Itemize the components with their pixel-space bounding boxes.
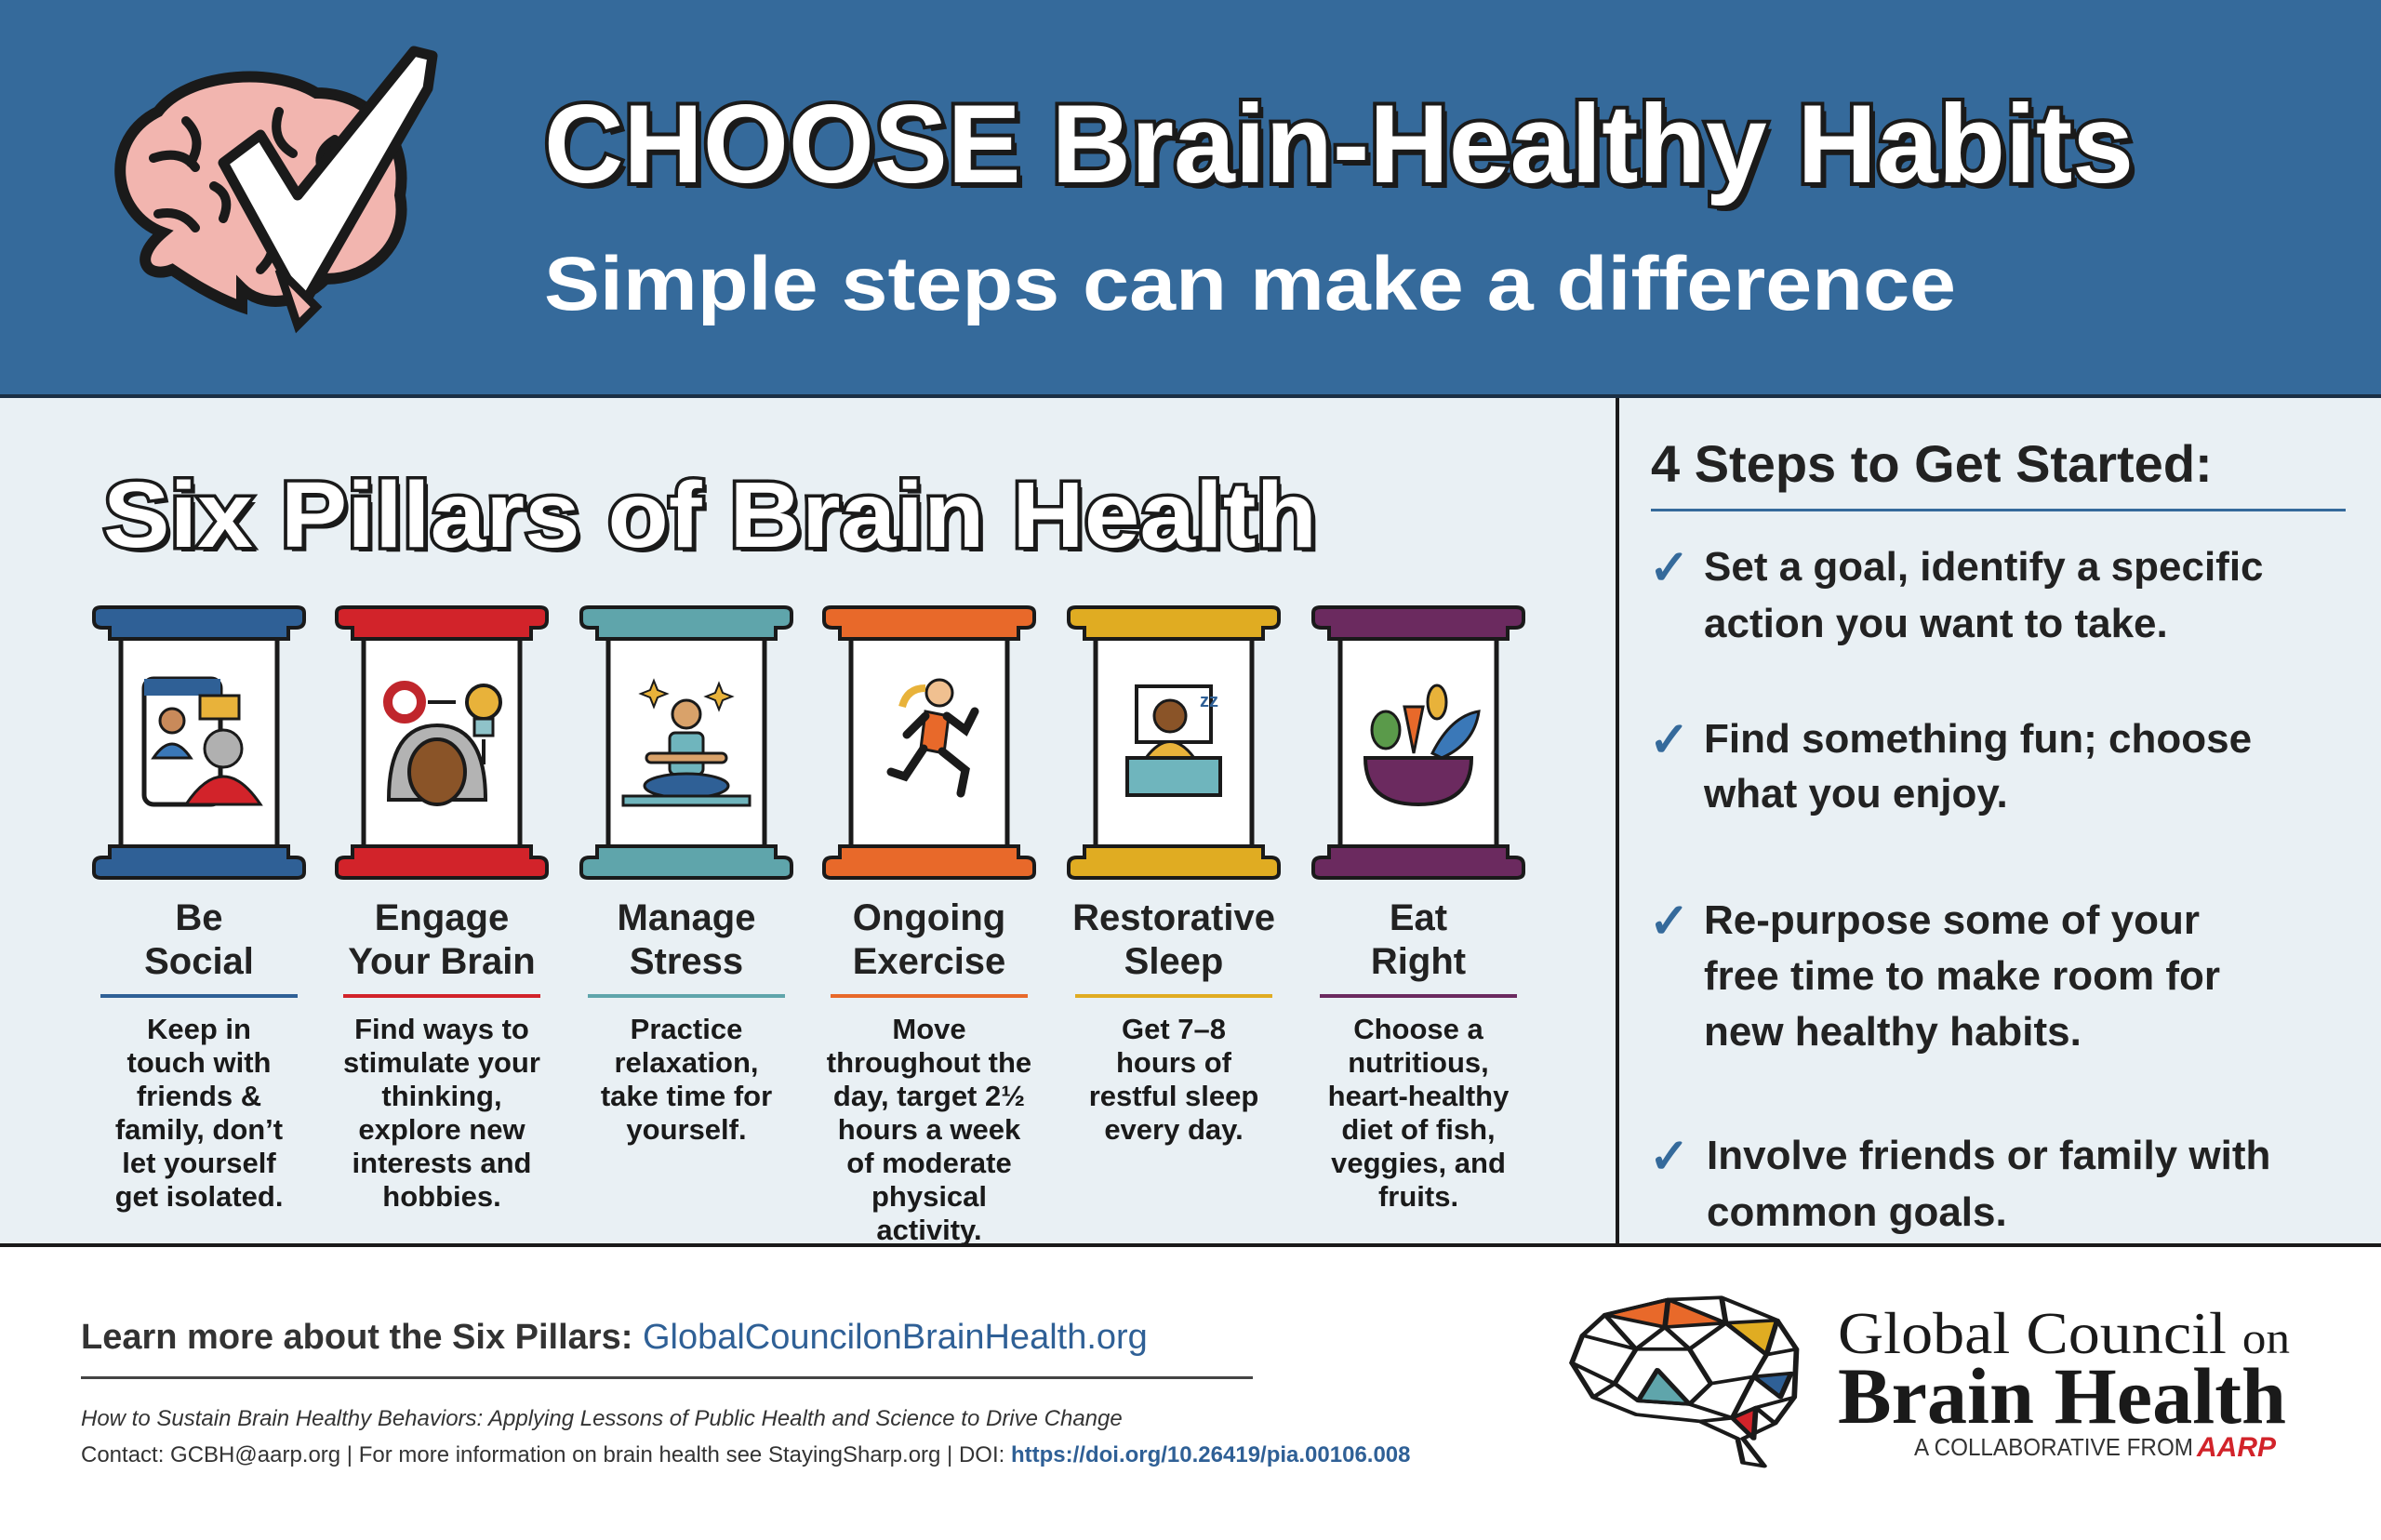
pillar: Eat Right (1313, 607, 1523, 1213)
title: CHOOSE Brain-Healthy Habits (544, 82, 2134, 206)
logo: Global Council on Brain Health: AARP (2196, 1432, 2277, 1463)
description: let yourself (122, 1147, 276, 1179)
pillar: Restorative Sleep: Sleep (1124, 941, 1223, 982)
subtitle: Simple steps can make a difference (544, 242, 1956, 326)
footer: learn more (81, 1318, 1253, 1379)
step 3: ✓ (1649, 895, 1690, 949)
description: family, don’t (115, 1113, 283, 1146)
heading: Six Pillars of Brain Health: Six Pillars of Brain Health (103, 463, 1317, 567)
pillar title: Eat (1390, 897, 1447, 938)
icon: food bowl (1365, 685, 1479, 804)
description: Keep in (147, 1013, 251, 1045)
step 2: what you enjoy. (1703, 771, 2008, 816)
step 1: action you want to take. (1704, 601, 2168, 646)
pillar: Restorative Sleep (1069, 607, 1279, 1146)
description: take time for (601, 1080, 772, 1112)
pillar: Engage Your Brain (337, 607, 547, 1213)
description: every day. (1104, 1113, 1244, 1146)
logo: Global Council on Brain Health: Brain Health (1838, 1351, 2286, 1440)
description: stimulate your (343, 1046, 540, 1079)
icon: video call (144, 679, 260, 804)
description: hobbies. (382, 1180, 501, 1213)
description: restful sleep (1089, 1080, 1258, 1112)
description: hours of (1116, 1046, 1232, 1079)
footer: citation: How to Sustain Brain Healthy Behaviors: Applying Lessons of Public Health and Science to Drive Change (81, 1406, 1123, 1431)
step 1: Set a goal, identify a specific (1704, 544, 2264, 590)
icon: runner (891, 680, 975, 793)
pillar: Ongoing Exercise (824, 607, 1034, 1246)
step 4: ✓ (1649, 1130, 1690, 1184)
steps heading: 4 Steps to Get Started: (1651, 434, 2213, 493)
description: Practice (631, 1013, 742, 1045)
step 3: Re-purpose some of your (1704, 897, 2200, 943)
description: interests and (352, 1147, 531, 1179)
step 4: common goals. (1707, 1189, 2007, 1235)
title: CHOOSE Brain-Healthy Habits (550, 87, 2139, 212)
description: explore new (358, 1113, 525, 1146)
logo: Global Council on Brain Health (1838, 1300, 2290, 1463)
step 3: free time to make room for (1704, 953, 2220, 999)
panel: 4 steps (1649, 434, 2346, 1235)
description: Get 7–8 (1122, 1013, 1226, 1045)
pillar title: Restorative (1072, 897, 1275, 938)
description: throughout the (827, 1046, 1031, 1079)
logo: network brain (1572, 1297, 1797, 1467)
description: friends & (137, 1080, 261, 1112)
icon: head with gear and bulb (388, 685, 500, 804)
description: Find ways to (354, 1013, 529, 1045)
pillar title: Manage (618, 897, 755, 938)
step 1 (1649, 541, 2264, 646)
step 2: ✓ (1649, 713, 1690, 767)
logo: Global Council on Brain Health: Global Council on (1838, 1300, 2290, 1366)
pillar: Ongoing Exercise: Exercise (853, 941, 1005, 982)
step 3: new healthy habits. (1704, 1009, 2082, 1055)
description: heart-healthy (1328, 1080, 1510, 1112)
icon: meditating person (623, 681, 750, 805)
step 2: Find something fun; choose (1704, 716, 2252, 762)
icon: person in bed: zz (1200, 691, 1218, 711)
footer: contact: Contact: GCBH@aarp.org | For more information on brain health see StayingSharp.org | DOI: https://doi.org/10.26419/pia.00106.008 (81, 1442, 1410, 1467)
pillar: Engage Your Brain: Your Brain (348, 941, 536, 982)
step 2 (1649, 713, 2252, 816)
step 3 (1649, 895, 2220, 1055)
description: get isolated. (115, 1180, 283, 1213)
pillar: Manage Stress (581, 607, 791, 1146)
description: diet of fish, (1341, 1113, 1496, 1146)
description: Move (892, 1013, 966, 1045)
step 4: Involve friends or family with (1707, 1133, 2270, 1178)
description: fruits. (1378, 1180, 1458, 1213)
pillar title: Ongoing (853, 897, 1005, 938)
description: day, target 2½ (833, 1080, 1025, 1112)
header band (0, 0, 2381, 398)
pillar title: Engage (375, 897, 509, 938)
heading: Six Pillars of Brain Health: Six Pillars of Brain Health (108, 468, 1322, 572)
step 1: ✓ (1649, 541, 1690, 595)
pillar title: Be (175, 897, 223, 938)
description: hours a week (838, 1113, 1021, 1146)
description: veggies, and (1331, 1147, 1506, 1179)
description: relaxation, (614, 1046, 759, 1079)
main panel background (0, 398, 2381, 1245)
icon: person in bed (1127, 686, 1220, 795)
description: Choose a (1353, 1013, 1484, 1045)
description: touch with (127, 1046, 271, 1079)
pillar: Eat Right: Right (1371, 941, 1466, 982)
pillar: Manage Stress: Stress (630, 941, 743, 982)
description: activity. (876, 1214, 982, 1246)
description: nutritious, (1348, 1046, 1489, 1079)
icon: brain with checkmark (120, 51, 432, 325)
description: thinking, (381, 1080, 502, 1112)
logo: Global Council on Brain Health: A COLLABORATIVE FROM (1914, 1433, 2193, 1461)
footer: learn more: Learn more about the Six Pillars: GlobalCouncilonBrainHealth.org (81, 1318, 1148, 1357)
description: yourself. (626, 1113, 747, 1146)
step 4 (1649, 1130, 2270, 1235)
pillar: Be Social (94, 607, 304, 1213)
description: of moderate (846, 1147, 1012, 1179)
pillar: Be Social: Social (144, 941, 254, 982)
description: physical (871, 1180, 987, 1213)
